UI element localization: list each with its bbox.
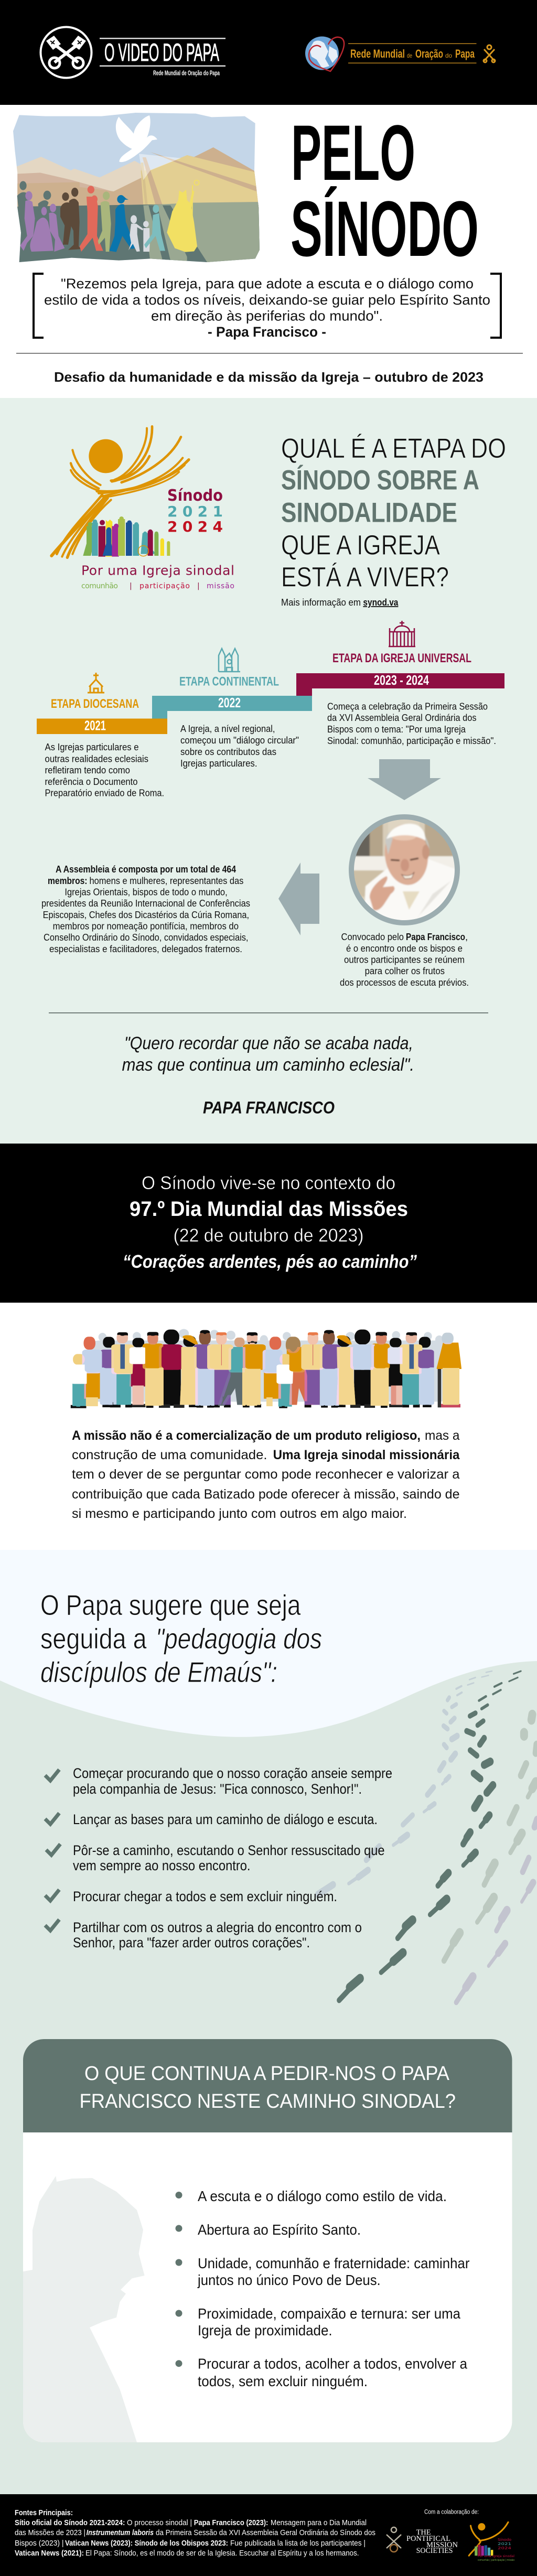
illustration: crowd of people — [72, 1329, 460, 1408]
footprints trails — [318, 1671, 537, 2002]
text: mission paragraph: Uma Igreja sinodal missionária — [273, 1448, 460, 1462]
stage 3: universal: Sinodal: comunhão, participação e missão". — [327, 735, 496, 746]
heading: Emmaus: seguida a — [40, 1622, 147, 1655]
card list: Igreja de proximidade. — [198, 2322, 332, 2338]
logo: small Sínodo mark: 2024 — [498, 2546, 512, 2550]
network name: Oração — [415, 47, 443, 60]
sources — [15, 2508, 375, 2558]
heading: stage question: SINODALIDADE — [281, 497, 457, 529]
check item 3 — [46, 1842, 385, 1873]
brand name — [100, 38, 225, 77]
heading: stage question: Mais informação em — [281, 597, 361, 608]
people silhouettes — [17, 180, 199, 252]
logo: Pontifical Mission Societies: SOCIETIES — [416, 2547, 453, 2555]
logo: Sínodo 2021-2024: | — [130, 582, 132, 590]
heading: stage question: SÍNODO SOBRE A — [281, 465, 479, 496]
quote: Pope Francis: "Quero recordar que não se acaba nada, — [124, 1033, 413, 1053]
network name: Rede Mundial — [350, 47, 405, 60]
panel: synod stages — [0, 398, 537, 1144]
queen figure — [167, 180, 199, 252]
sources: El Papa: Sínodo, es el modo de ser de la Iglesia. Escuchar al Espíritu y a los hermanos. — [85, 2549, 359, 2558]
logo: Pontifical Mission Societies: MISSION — [426, 2541, 458, 2549]
sources: Vatican News (2023): Sínodo de los Obispos 2023: — [65, 2539, 228, 2548]
heading: Emmaus: "pedagogia dos — [156, 1622, 322, 1655]
header band — [0, 0, 537, 105]
stage 2: continental: começou um "diálogo circular" — [180, 735, 299, 746]
footer band — [0, 2494, 537, 2576]
prayer quote with brackets — [34, 274, 501, 340]
heading: Emmaus — [40, 1589, 322, 1688]
text: mission paragraph: contribuição que cada Batizado pode oferecer à missão, saindo de — [72, 1487, 459, 1502]
logo: small Sínodo mark: Sínodo — [498, 2538, 511, 2542]
logo: Pontifical Mission Societies: PONTIFICAL — [406, 2535, 450, 2543]
check item 3: vem sempre ao nosso encontro. — [73, 1858, 251, 1873]
text: assembly members — [41, 864, 250, 954]
collaboration label: Com a colaboração de: — [424, 2509, 479, 2516]
card list: Proximidade, compaixão e ternura: ser uma — [198, 2305, 460, 2322]
network name: do — [445, 52, 452, 59]
sources: Fontes Principais: — [15, 2508, 73, 2517]
logo: crossed keys — [41, 27, 91, 78]
stage 1: diocesan: 2021 — [84, 718, 106, 734]
card list: juntos no único Povo de Deus. — [197, 2272, 381, 2288]
text: Pope convocation: outros participantes se reúnem — [344, 954, 465, 965]
check item 5: Partilhar com os outros a alegria do encontro com o — [73, 1920, 362, 1935]
card list: A escuta e o diálogo como estilo de vida. — [198, 2188, 447, 2204]
logo: Sínodo 2021-2024: comunhão — [81, 582, 118, 590]
check item 4: Procurar chegar a todos e sem excluir ninguém. — [73, 1889, 337, 1904]
card list: Procurar a todos, acolher a todos, envolver a — [198, 2356, 467, 2372]
panel: Emmaus section — [0, 1550, 537, 2494]
logo: Sínodo 2021-2024: 2021 — [167, 503, 223, 520]
dove — [116, 115, 157, 162]
sources: Papa Francisco (2023): — [194, 2518, 268, 2527]
stage 3: universal: Bispos com o tema: "Por uma Igreja — [327, 724, 466, 735]
card list: Unidade, comunhão e fraternidade: caminhar — [198, 2255, 470, 2271]
sources: Bispos (2023) | — [15, 2539, 64, 2548]
prayer quote with brackets: em direção às periferias do mundo". — [151, 308, 383, 324]
stage 1: diocesan: outras realidades eclesiais — [45, 753, 148, 764]
stage 1: diocesan — [37, 673, 167, 798]
heading: stage question: QUE A IGREJA — [281, 530, 441, 561]
stage 3: universal: ETAPA DA IGREJA UNIVERSAL — [332, 651, 471, 665]
sources: Instrumentum laboris — [87, 2528, 154, 2537]
quote: Pope Francis: mas que continua um caminho eclesial". — [122, 1055, 414, 1075]
logo: Sínodo 2021-2024 — [51, 426, 234, 590]
brand name: O VIDEO DO PAPA — [104, 38, 219, 66]
logo: small Sínodo mark — [469, 2522, 514, 2562]
stage 1: diocesan: ETAPA DIOCESANA — [51, 697, 139, 711]
network name — [348, 43, 476, 63]
sources: Sítio oficial do Sínodo 2021-2024: — [15, 2518, 125, 2527]
stage 2: continental — [152, 649, 312, 769]
silhouette: Pope profile — [21, 2176, 145, 2442]
sources: das Missões de 2023 | — [15, 2528, 85, 2537]
text: assembly members: Conselho Ordinário do Sínodo, convidados especiais, — [44, 932, 249, 943]
text: mission paragraph: construção de uma comunidade. — [72, 1448, 267, 1462]
stage 3: universal — [296, 621, 504, 746]
logo: small Sínodo mark: comunhão | participação | missão — [478, 2559, 514, 2562]
card list: todos, sem excluir ninguém. — [198, 2373, 368, 2389]
stage 2: continental: A Igreja, a nível regional, — [180, 723, 275, 734]
panel: World Mission Day band: O Sínodo vive-se no contexto do — [142, 1173, 395, 1193]
prayer quote with brackets: "Rezemos pela Igreja, para que adote a escuta e o diálogo como — [61, 276, 474, 292]
stage 3: universal: Começa a celebração da Primeira Sessão — [327, 701, 488, 712]
heading: stage question: ESTÁ A VIVER? — [281, 562, 449, 592]
stage 1: diocesan: referência o Documento — [45, 776, 137, 787]
stage 1: diocesan: Preparatório enviado de Roma. — [45, 788, 164, 798]
quote: Pope Francis: PAPA FRANCISCO — [203, 1098, 335, 1117]
text: Pope convocation: para colher os frutos — [365, 965, 445, 976]
stage 2: continental: ETAPA CONTINENTAL — [179, 675, 279, 689]
arrow: left — [278, 863, 319, 935]
card heading — [80, 2063, 456, 2112]
check item 3: Pôr-se a caminho, escutando o Senhor ressuscitado que — [73, 1842, 385, 1858]
icon: gold keys — [484, 45, 495, 62]
logo: Pontifical Mission Societies: THE — [416, 2528, 431, 2537]
checklist — [45, 1765, 392, 1950]
stage 3: universal: da XVI Assembleia Geral Ordinária dos — [327, 712, 476, 723]
stage 2: continental: Igrejas particulares. — [180, 758, 257, 769]
text: assembly members: A Assembleia é composta por um total de 464 — [56, 864, 237, 875]
network name: de — [407, 52, 412, 59]
check item 5: Senhor, para "fazer arder outros corações". — [73, 1935, 310, 1950]
stage 3: universal: 2023 - 2024 — [374, 672, 429, 688]
subtitle: Desafio da humanidade e da missão da Igreja – outubro de 2023 — [54, 369, 484, 385]
check item 1: Começar procurando que o nosso coração anseie sempre — [73, 1765, 392, 1781]
stage 2: continental: sobre os contributos das — [180, 746, 276, 757]
sources: da Primeira Sessão da XVI Assembleia Geral Ordinária do Sínodo dos — [156, 2528, 375, 2537]
arrow: down — [368, 759, 441, 800]
title: PELO — [291, 109, 415, 197]
panel: World Mission Day band — [0, 1144, 537, 1302]
logo: Sínodo 2021-2024: | — [197, 582, 200, 590]
card list: Abertura ao Espírito Santo. — [198, 2222, 361, 2238]
card heading: O QUE CONTINUA A PEDIR-NOS O PAPA — [84, 2063, 450, 2085]
text: Pope convocation: Papa Francisco — [406, 931, 465, 942]
text: Pope convocation — [340, 931, 469, 988]
check item 1 — [45, 1765, 392, 1797]
card: what the Pope asks — [21, 2039, 512, 2442]
logo: globe with heart — [305, 37, 344, 71]
text: Pope convocation: Convocado pelo — [341, 931, 404, 942]
logo: Sínodo 2021-2024: participação — [139, 582, 190, 590]
panel: World Mission Day band: “Corações ardentes, pés ao caminho” — [123, 1252, 417, 1272]
prayer quote with brackets: - Papa Francisco - — [208, 324, 326, 340]
text: mission paragraph — [72, 1428, 460, 1521]
sources: Mensagem para o Dia Mundial — [271, 2518, 367, 2527]
logo: Sínodo 2021-2024: missão — [207, 582, 234, 590]
text: assembly members: especialistas e facilitadores, delegados fraternos. — [49, 943, 242, 954]
text: Pope convocation: , — [465, 931, 468, 942]
heading: Emmaus: discípulos de Emaús": — [40, 1656, 277, 1688]
heading: stage question: synod.va — [363, 597, 399, 608]
text: mission paragraph: A missão não é a comercialização de um produto religioso, — [72, 1428, 421, 1443]
sources: Vatican News (2021): — [15, 2549, 84, 2558]
illustration: people walking with dove — [10, 110, 264, 267]
text: Pope convocation: é o encontro onde os bispos e — [346, 943, 463, 954]
text: mission paragraph: si mesmo e participando junto com outros em algo maior. — [72, 1506, 407, 1521]
network name: Papa — [455, 47, 475, 60]
title — [291, 109, 479, 273]
text: assembly members: membros por nomeação pontifícia, membros do — [53, 921, 239, 931]
quote: Pope Francis — [122, 1033, 414, 1117]
panel: World Mission Day band: 97.º Dia Mundial das Missões — [130, 1198, 408, 1221]
icon: church — [88, 673, 104, 693]
brand name: Rede Mundial de Oração do Papa — [153, 69, 220, 77]
stage 2: continental: 2022 — [218, 695, 241, 710]
logo: Sínodo 2021-2024: 2024 — [167, 518, 223, 535]
sources: Fue publicada la lista de los participantes | — [230, 2539, 366, 2548]
text: assembly members: membros: — [48, 875, 87, 886]
card list — [175, 2188, 470, 2389]
text: mission paragraph: mas a — [425, 1428, 460, 1443]
check item 2: Lançar as bases para um caminho de diálogo e escuta. — [73, 1812, 378, 1827]
text: assembly members: homens e mulheres, representantes das — [89, 875, 243, 886]
sources: O processo sinodal | — [127, 2518, 192, 2527]
text: assembly members: Igrejas Orientais, bispos de todo o mundo, — [65, 887, 228, 898]
panel: World Mission Day band: (22 de outubro de 2023) — [173, 1225, 364, 1246]
prayer quote with brackets: estilo de vida a todos os níveis, deixando-se guiar pelo Espírito Santo — [44, 292, 490, 308]
heading: stage question — [281, 433, 506, 608]
logo: Pontifical Mission Societies — [386, 2527, 458, 2555]
text: assembly members: Episcopais, Chefes dos Dicastérios da Cúria Romana, — [43, 909, 249, 920]
text: assembly members: presidentes da Reunião Internacional de Conferências — [41, 898, 250, 909]
photo: Pope Francis — [346, 813, 461, 928]
check item 5 — [45, 1920, 362, 1950]
text: mission paragraph: tem o dever de se perguntar como pode reconhecer e valorizar a — [72, 1467, 460, 1482]
card heading: FRANCISCO NESTE CAMINHO SINODAL? — [80, 2090, 456, 2112]
logo: small Sínodo mark: 2021 — [498, 2542, 511, 2546]
logo: Sínodo 2021-2024: Por uma Igreja sinodal — [81, 563, 234, 578]
check item 1: pela companhia de Jesus: "Fica connosco, Senhor!". — [73, 1781, 362, 1797]
icon: basilica — [389, 621, 415, 646]
text: Pope convocation: dos processos de escuta prévios. — [340, 977, 469, 988]
logo: small Sínodo mark: Por uma Igreja sinodal — [478, 2555, 514, 2558]
heading: Emmaus: O Papa sugere que seja — [40, 1589, 301, 1621]
logo: Sínodo 2021-2024: Sínodo — [167, 487, 223, 505]
icon: cathedral — [219, 649, 240, 672]
stage 1: diocesan: refletiram tendo como — [45, 764, 130, 775]
stage 1: diocesan: As Igrejas particulares e — [45, 741, 138, 752]
